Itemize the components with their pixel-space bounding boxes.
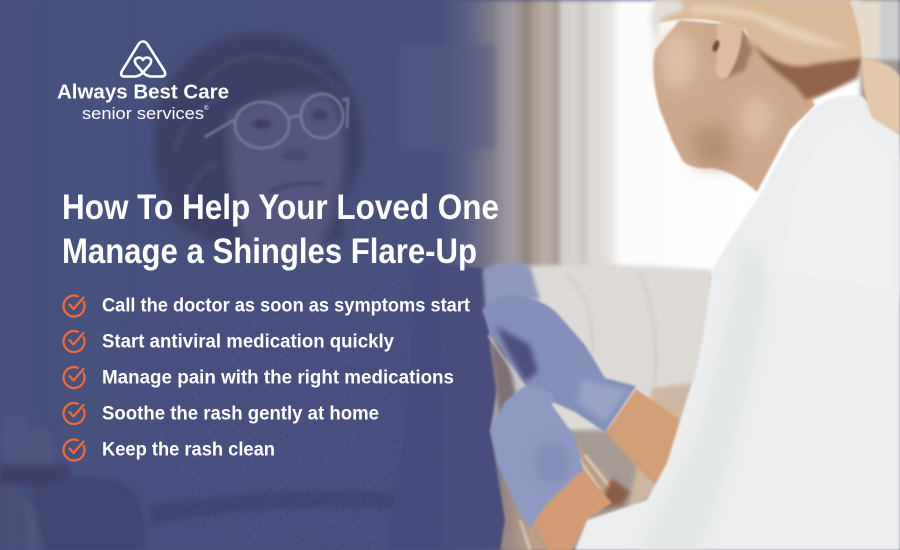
- title: How To Help Your Loved One: [62, 188, 499, 227]
- brown shadow strip: [490, 340, 517, 420]
- cushion shadow: [596, 478, 630, 510]
- needle: [488, 335, 522, 385]
- hair: [153, 32, 363, 250]
- upper forearm: [606, 389, 680, 490]
- mouth: [270, 183, 322, 192]
- upper glove wrinkles: [578, 380, 628, 422]
- gray sleeve blob: [483, 263, 540, 310]
- item 1: Call the doctor as soon as symptoms start: [102, 296, 471, 316]
- sofa seams: [565, 272, 656, 385]
- logo icon: [121, 42, 165, 77]
- dress: [85, 265, 440, 550]
- logo name: Always Best Care: [57, 80, 229, 104]
- sofa: [490, 265, 712, 430]
- item 5: Keep the rash clean: [102, 440, 275, 460]
- ponytail: [862, 57, 900, 135]
- shoulder and sleeve: [395, 265, 505, 550]
- ear: [716, 19, 742, 79]
- glasses: [205, 94, 348, 148]
- dress lower shadow: [150, 492, 420, 525]
- coat shoulder highlight: [770, 110, 900, 300]
- logo tagline: senior services: [82, 104, 204, 123]
- hair band highlight: [690, 5, 850, 48]
- neck highlight: [741, 96, 773, 140]
- eyes: [252, 110, 328, 129]
- title: Manage a Shingles Flare-Up: [62, 232, 477, 271]
- checklist: [64, 296, 471, 461]
- title: [62, 188, 499, 271]
- item 3: Manage pain with the right medications: [102, 368, 454, 388]
- dark under hair: [752, 42, 862, 100]
- lower glove: [490, 386, 583, 528]
- nurse face and neck: [653, 20, 815, 192]
- hair mass: [654, 0, 862, 102]
- ear inner: [711, 39, 721, 53]
- top right backdrop: [850, 0, 900, 60]
- hair highlights: [175, 56, 345, 205]
- registered mark: ®: [204, 105, 209, 112]
- upper glove palm shadow: [496, 326, 538, 382]
- hand on cane: [0, 414, 145, 550]
- behind ear shadow: [722, 25, 752, 80]
- background window panel under overlay: [400, 45, 495, 150]
- lower forearm: [534, 470, 612, 550]
- old woman: [0, 32, 505, 550]
- item 2: Start antiviral medication quickly: [102, 332, 394, 352]
- logo: [57, 42, 229, 123]
- left side background tones: [0, 0, 120, 500]
- arm: [385, 260, 445, 550]
- item 4: Soothe the rash gently at home: [102, 404, 379, 424]
- coat shading: [640, 240, 770, 550]
- jaw shadow: [690, 125, 735, 166]
- face highlight: [660, 30, 696, 90]
- lower glove shade: [534, 440, 570, 484]
- cushion stripes: [520, 440, 612, 550]
- nurse white coat: [575, 95, 900, 550]
- nurse gloves: [482, 263, 636, 528]
- face: [228, 92, 344, 262]
- right cushion: [628, 383, 695, 510]
- striped cushion: [500, 400, 625, 550]
- dress lace: [155, 270, 420, 550]
- upper glove: [482, 295, 636, 432]
- front white hair: [650, 0, 684, 45]
- nose: [282, 149, 308, 161]
